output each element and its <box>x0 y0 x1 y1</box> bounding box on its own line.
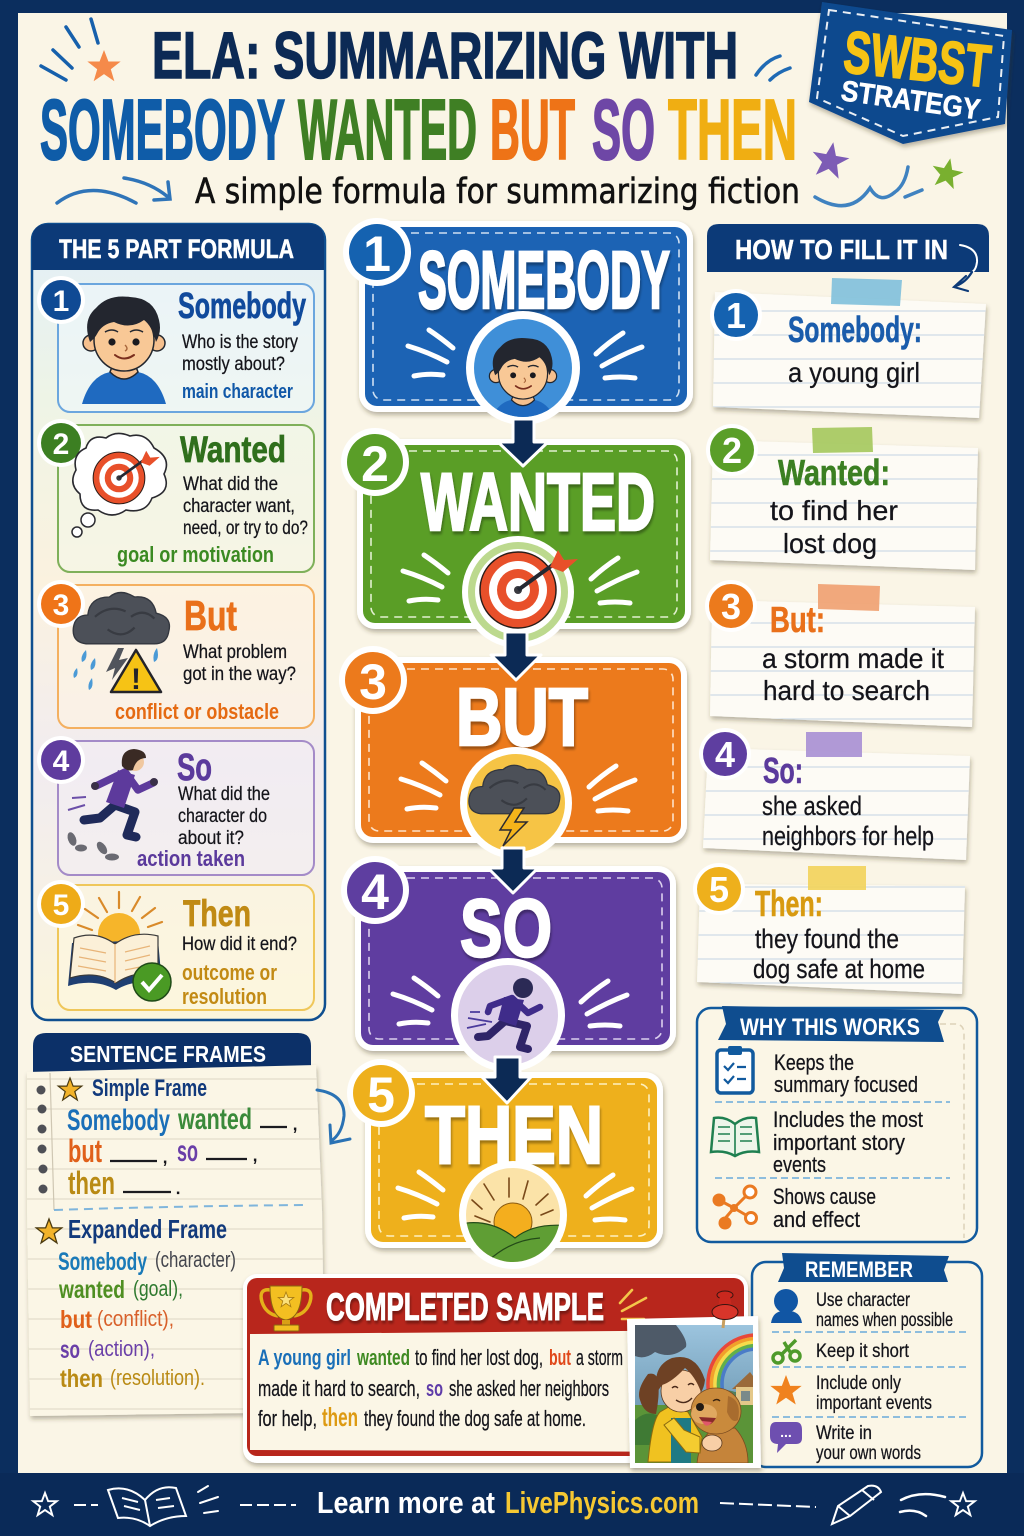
decorative swooshes right of title <box>756 56 790 80</box>
expanded frame: then <box>60 1365 103 1393</box>
icon: storm circle <box>460 747 572 859</box>
tape <box>808 866 866 890</box>
card text: outcome or <box>182 960 277 985</box>
card: so <box>37 736 314 875</box>
simple frame: , <box>292 1110 298 1135</box>
expanded frame: (action), <box>88 1336 155 1361</box>
paper <box>710 600 975 727</box>
item: keep it short <box>773 1340 910 1363</box>
simple frame: but <box>68 1133 102 1169</box>
card: somebody <box>37 276 314 412</box>
icon: left star <box>33 1493 57 1515</box>
item: keep it short: Keep it short <box>816 1341 910 1362</box>
title line two: SOMEBODY <box>40 83 285 178</box>
panel: why this works <box>697 1006 977 1242</box>
tape <box>831 278 902 306</box>
item: keeps the summary focused: summary focused <box>774 1072 918 1097</box>
note 2: lost dog <box>783 528 877 559</box>
step 3: but <box>339 646 687 859</box>
simple frame: Somebody <box>67 1104 170 1137</box>
card text: What did the <box>178 784 270 805</box>
icon: green scissors <box>773 1340 800 1363</box>
card text: Somebody <box>178 285 306 326</box>
item: own words: Write in <box>816 1423 872 1444</box>
card <box>359 221 693 412</box>
number badge 1: 1 <box>53 285 69 318</box>
card text: mostly about? <box>182 354 285 375</box>
icon: thought cloud with target <box>72 433 166 537</box>
push pin <box>712 1291 738 1328</box>
simple frame: , <box>162 1143 168 1168</box>
card text <box>182 893 297 1009</box>
item: cause and effect: and effect <box>773 1207 860 1232</box>
arrow: curved blue <box>317 1090 350 1143</box>
text: Wanted: <box>778 452 890 493</box>
simple frame: Simple Frame <box>92 1075 207 1102</box>
ribbon heading <box>778 1253 949 1282</box>
note 3: a storm made it <box>762 643 944 674</box>
step 5: then <box>347 1059 663 1270</box>
badge 1 <box>343 218 411 286</box>
simple frame: . <box>175 1174 181 1199</box>
badge <box>706 424 758 476</box>
photo: girl hugging dog <box>625 1290 765 1473</box>
note 4: she asked <box>762 791 862 821</box>
note 2 <box>706 424 978 570</box>
simple frame: , <box>252 1141 258 1166</box>
expanded frame: (goal), <box>133 1276 183 1301</box>
icon: orange star <box>770 1375 802 1404</box>
title line two: SO <box>592 83 655 178</box>
badge <box>710 289 762 341</box>
text: So: <box>763 750 803 791</box>
title line one: ELA: SUMMARIZING WITH <box>152 18 738 92</box>
left dashes <box>74 1504 296 1506</box>
expanded frame <box>36 1214 236 1393</box>
dashed inner edge <box>940 1024 964 1238</box>
note 1 <box>710 278 986 418</box>
arrow 2 to 3 <box>491 632 541 680</box>
card text: So <box>177 747 212 789</box>
footer text: Learn more at <box>317 1485 495 1520</box>
arrow 1 to 2 <box>498 419 548 466</box>
icon: network nodes <box>712 1186 756 1230</box>
heading: COMPLETED SAMPLE <box>326 1286 604 1329</box>
number badge 4 <box>37 736 85 784</box>
note 2: to find her <box>770 495 898 526</box>
arrow 4 to 5 <box>482 1057 531 1103</box>
step 4: so <box>341 856 676 1072</box>
footer: LivePhysics.com <box>505 1485 699 1520</box>
card: but <box>37 580 314 728</box>
panel heading: THE 5 PART FORMULA <box>59 234 294 264</box>
icon: target circle <box>462 536 578 648</box>
swoosh right of subtitle <box>815 167 922 206</box>
panel: how to fill it in <box>693 224 989 994</box>
step 2: wanted <box>341 428 691 648</box>
label: THEN <box>425 1090 603 1181</box>
panel frame <box>32 224 325 1020</box>
icon: clipboard <box>717 1046 753 1093</box>
card <box>365 1072 663 1248</box>
arrow 3 to 4 <box>488 848 538 893</box>
card text: What problem <box>183 642 287 663</box>
expanded frame: (resolution). <box>110 1365 205 1390</box>
badge: 2 <box>722 430 742 471</box>
icon: orange star with rays <box>41 19 121 81</box>
note 4 <box>699 728 970 860</box>
photo frame <box>627 1316 761 1468</box>
heading <box>33 1033 311 1076</box>
simple frame: then <box>68 1165 115 1201</box>
ribbon heading: WHY THIS WORKS <box>740 1014 920 1041</box>
center flow <box>339 218 693 1270</box>
rays <box>401 763 635 811</box>
badge 4: 4 <box>361 864 389 920</box>
icon: sunrise circle <box>459 1161 570 1270</box>
icon: person <box>771 1289 802 1323</box>
item: important events <box>770 1373 932 1414</box>
icon: open book <box>108 1487 186 1526</box>
sample text: a storm <box>576 1345 623 1370</box>
badge 3: 3 <box>359 654 387 710</box>
paper <box>713 292 986 418</box>
badge: 1 <box>726 295 746 336</box>
badge: 4 <box>715 734 735 775</box>
label: SOMEBODY <box>418 235 670 326</box>
icon: speech bubble <box>770 1422 802 1453</box>
badge 2: 2 <box>361 436 389 492</box>
expanded frame: Expanded Frame <box>68 1214 227 1244</box>
item: keeps the summary focused: Keeps the <box>774 1050 854 1075</box>
right dashes <box>720 1503 816 1507</box>
number badge 2 <box>37 419 85 467</box>
item: character names <box>771 1289 953 1331</box>
ribbon heading: REMEMBER <box>805 1257 913 1282</box>
panel: completed sample <box>243 1274 748 1463</box>
notebook paper <box>27 1065 325 1416</box>
paper <box>710 440 978 570</box>
item: includes important events: events <box>773 1152 826 1177</box>
icon: open book with sun and check <box>68 892 171 1001</box>
number badge 3: 3 <box>53 589 69 622</box>
title line two: THEN <box>668 83 797 178</box>
badge: SWBST strategy <box>809 2 1012 144</box>
card text: Then <box>183 893 251 934</box>
note 3: hard to search <box>763 675 930 706</box>
text: Then: <box>755 883 823 924</box>
frame <box>752 1262 982 1467</box>
card text: about it? <box>178 828 244 849</box>
title line two: BUT <box>490 83 575 178</box>
sample text: she asked her neighbors <box>449 1376 609 1401</box>
panel: remember <box>752 1253 982 1467</box>
frame <box>697 1008 977 1242</box>
paper <box>697 884 965 994</box>
storm cloud <box>635 1325 686 1357</box>
subtitle: A simple formula for summarizing fiction <box>195 172 800 212</box>
icon: green book <box>711 1118 759 1156</box>
card text: conflict or obstacle <box>115 699 279 724</box>
badge: 3 <box>721 586 741 627</box>
icon: right star <box>951 1493 975 1515</box>
card <box>355 866 676 1051</box>
text: Somebody: <box>788 309 922 350</box>
sample text: wanted <box>356 1345 410 1370</box>
card text <box>117 429 308 567</box>
girl <box>639 1357 705 1463</box>
item: includes important events <box>711 1107 923 1177</box>
card text: need, or try to do? <box>183 518 308 539</box>
heading: SENTENCE FRAMES <box>70 1041 266 1067</box>
item: important events: Include only <box>816 1373 901 1394</box>
number badge 4: 4 <box>53 745 70 778</box>
card text <box>178 285 306 403</box>
card text: How did it end? <box>182 934 297 955</box>
paper <box>703 748 970 860</box>
sample text: to find her lost dog, <box>415 1345 543 1370</box>
card text: resolution <box>182 984 267 1009</box>
step 1: somebody <box>343 218 693 426</box>
dog body <box>697 1428 748 1463</box>
card text: character want, <box>183 496 295 517</box>
card: wanted <box>37 419 314 572</box>
card <box>355 657 687 843</box>
margin line <box>50 1073 54 1210</box>
badge <box>705 580 757 632</box>
bushes <box>635 1414 657 1445</box>
badge 2 <box>341 428 409 496</box>
footer sparks <box>198 1486 218 1513</box>
label: BUT <box>456 672 588 763</box>
icon: green star <box>929 155 966 190</box>
panel heading <box>32 224 324 270</box>
card <box>357 439 691 629</box>
sparks <box>620 1290 646 1319</box>
heading <box>707 224 989 291</box>
badge 1: 1 <box>363 226 391 282</box>
icon: storm cloud with warning: ! <box>131 663 141 696</box>
icon: pencil <box>832 1486 881 1524</box>
sample text: made it hard to search, <box>258 1376 420 1401</box>
card text: got in the way? <box>183 664 296 685</box>
rainbow <box>706 1333 753 1390</box>
expanded frame: (character) <box>155 1247 236 1272</box>
expanded frame: (conflict), <box>97 1306 174 1331</box>
item: keeps the summary focused <box>717 1046 918 1097</box>
expanded frame: but <box>60 1306 93 1334</box>
badge 5: 5 <box>367 1067 395 1123</box>
card text: goal or motivation <box>117 542 274 567</box>
item: important events: important events <box>816 1393 932 1414</box>
note 5: dog safe at home <box>753 954 925 984</box>
simple frame: wanted <box>177 1103 252 1136</box>
card text: character do <box>178 806 267 827</box>
tape <box>812 427 873 453</box>
card text: Who is the story <box>182 332 298 353</box>
photo scene <box>635 1325 753 1463</box>
ribbon heading <box>718 1006 944 1042</box>
note 4: neighbors for help <box>762 821 934 851</box>
badge: 5 <box>709 869 729 910</box>
card text <box>137 747 270 871</box>
rays <box>403 555 637 603</box>
note 5 <box>693 863 965 994</box>
expanded frame: Somebody <box>58 1248 147 1276</box>
notebook holes <box>36 1086 48 1194</box>
card text: But <box>184 592 237 639</box>
rays <box>408 330 642 378</box>
icon: storm cloud with warning <box>73 592 169 696</box>
card: then <box>37 880 314 1010</box>
grass <box>635 1405 753 1463</box>
rays <box>398 1172 632 1220</box>
rays <box>393 978 627 1026</box>
arrow: swoosh left of subtitle <box>57 178 170 203</box>
icon: trophy <box>261 1286 311 1331</box>
house <box>732 1372 753 1405</box>
label: SO <box>460 883 552 974</box>
icon: running figure <box>66 749 158 860</box>
badge: SWBST strategy: STRATEGY <box>839 75 982 126</box>
icon: speech bubble: ... <box>780 1424 792 1440</box>
footer <box>0 1473 1024 1536</box>
item: includes important events: important story <box>773 1130 905 1155</box>
header block <box>40 18 966 212</box>
heading: HOW TO FILL IT IN <box>735 234 948 265</box>
footer band <box>0 1473 1024 1536</box>
sample text: but <box>549 1345 571 1370</box>
card frame <box>243 1274 748 1463</box>
expanded frame: wanted <box>58 1276 125 1304</box>
simple frame: so <box>177 1135 198 1168</box>
sample text <box>258 1345 623 1432</box>
item: own words <box>770 1422 921 1464</box>
card text: Wanted <box>180 429 286 470</box>
panel: the 5 part formula <box>32 224 325 1020</box>
sample text: A young girl <box>258 1345 351 1370</box>
tape <box>818 584 880 611</box>
text: But: <box>770 599 825 640</box>
hand <box>702 1435 722 1451</box>
number badge 5: 5 <box>53 889 69 922</box>
dog head <box>691 1388 741 1434</box>
badge 3 <box>339 646 407 714</box>
card text: What did the <box>183 474 278 495</box>
item: includes important events: Includes the most <box>773 1107 923 1132</box>
icon: purple star <box>809 139 852 180</box>
icon: boy <box>82 296 166 404</box>
number badge 1 <box>37 276 85 324</box>
simple frame <box>58 1075 298 1201</box>
sample text: so <box>426 1376 443 1401</box>
badge <box>699 728 751 780</box>
expanded frame: so <box>60 1336 80 1364</box>
icon: boy circle <box>466 311 580 426</box>
item: character names: names when possible <box>816 1310 953 1331</box>
card body <box>250 1330 744 1452</box>
footer swooshes <box>900 1494 945 1516</box>
distant hills <box>728 1390 736 1396</box>
card text: main character <box>182 381 293 403</box>
panel: sentence frames <box>27 1033 350 1416</box>
badge 4 <box>341 856 409 924</box>
number badge 3 <box>37 580 85 628</box>
card text: action taken <box>137 846 245 871</box>
note 5: they found the <box>755 924 899 954</box>
icon: runner circle <box>451 958 565 1072</box>
note 3 <box>705 580 975 727</box>
badge <box>693 863 745 915</box>
heading <box>261 1286 646 1331</box>
item: character names: Use character <box>816 1290 911 1311</box>
card text <box>115 592 296 724</box>
sample text: they found the dog safe at home. <box>364 1406 586 1431</box>
title line two: WANTED <box>298 83 477 178</box>
item: cause and effect: Shows cause <box>773 1184 876 1209</box>
sky <box>635 1325 753 1405</box>
note 1: a young girl <box>788 357 920 388</box>
number badge 2: 2 <box>53 428 69 461</box>
sample text: then <box>322 1402 358 1432</box>
sample text: for help, <box>258 1406 317 1431</box>
item: own words: your own words <box>816 1443 921 1464</box>
number badge 5 <box>37 880 85 928</box>
item: cause and effect <box>712 1184 876 1232</box>
label: WANTED <box>421 457 655 548</box>
tape <box>806 732 862 757</box>
title line two <box>40 83 797 178</box>
badge 5 <box>347 1059 415 1127</box>
